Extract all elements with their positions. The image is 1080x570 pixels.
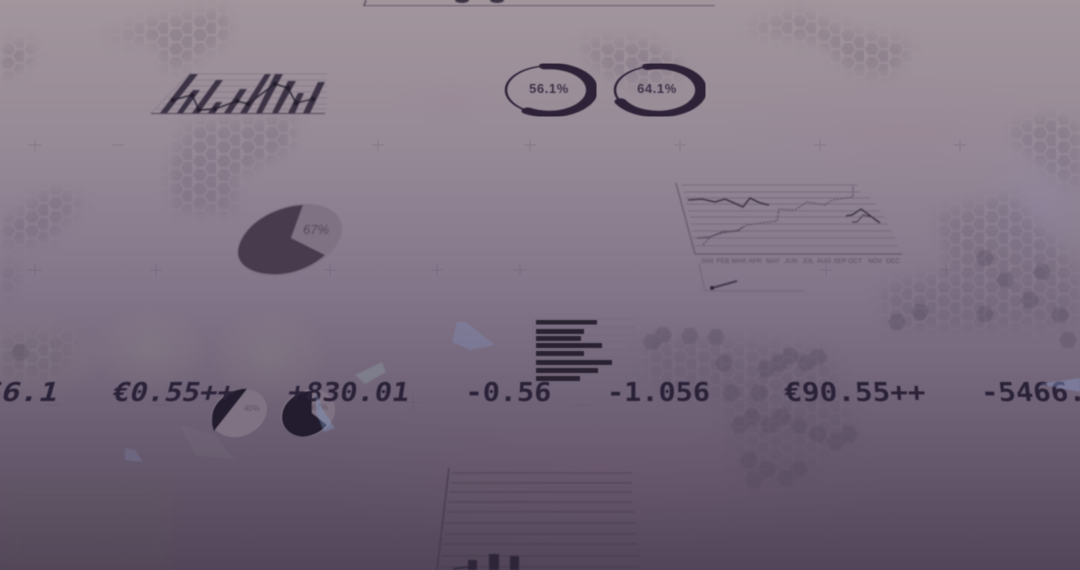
pie chart: 67%: 67% — [303, 222, 329, 237]
pie chart: 67% — [228, 191, 352, 289]
prominent hexagons — [11, 250, 1077, 488]
ticker values: €0.55++ — [109, 377, 239, 408]
line chart: monthly — [676, 183, 902, 265]
grid lines and cross marks — [28, 139, 983, 546]
line chart: monthly: DEC — [886, 258, 900, 265]
donut: 64.1% — [615, 66, 701, 114]
ticker values: +830.01 — [286, 378, 412, 408]
bottom bar chart — [437, 468, 640, 570]
ticker values — [0, 377, 1080, 408]
small pie chart: 67%: 67% — [312, 403, 328, 412]
hexagon clusters — [2, 13, 1078, 358]
horizontal bar chart — [533, 318, 642, 384]
line chart: monthly: MAY — [766, 258, 780, 265]
line chart: monthly: MAR — [732, 258, 747, 265]
lens flares — [125, 322, 1080, 462]
small pie chart: 67% — [273, 380, 343, 446]
small lower line chart — [699, 264, 805, 291]
line chart: monthly: JUL — [802, 258, 814, 265]
line chart: monthly: AUG — [817, 258, 831, 265]
ticker values: -0.56 — [465, 378, 552, 408]
line chart: monthly: JUN — [785, 258, 798, 265]
line chart: monthly: FEB — [717, 258, 729, 265]
small pie chart: 40%: 40% — [244, 404, 260, 413]
line chart: monthly: SEP — [833, 258, 847, 265]
ticker values: €90.55++ — [783, 378, 926, 408]
donut: 64.1%: 64.1% — [637, 81, 677, 96]
donut: 56.1%: 56.1% — [529, 81, 569, 96]
top cut-off chart — [363, 0, 715, 6]
donut: 56.1% — [506, 66, 592, 114]
line chart: monthly: APR — [748, 258, 762, 265]
line chart: monthly: OCT — [848, 258, 862, 265]
ticker values: -1.056 — [607, 378, 710, 408]
line chart: monthly: NOV — [868, 258, 883, 265]
line chart: monthly: JAN — [701, 258, 713, 265]
small pie chart: 40% — [203, 380, 275, 446]
chart: skewed bars with line — [151, 72, 327, 114]
